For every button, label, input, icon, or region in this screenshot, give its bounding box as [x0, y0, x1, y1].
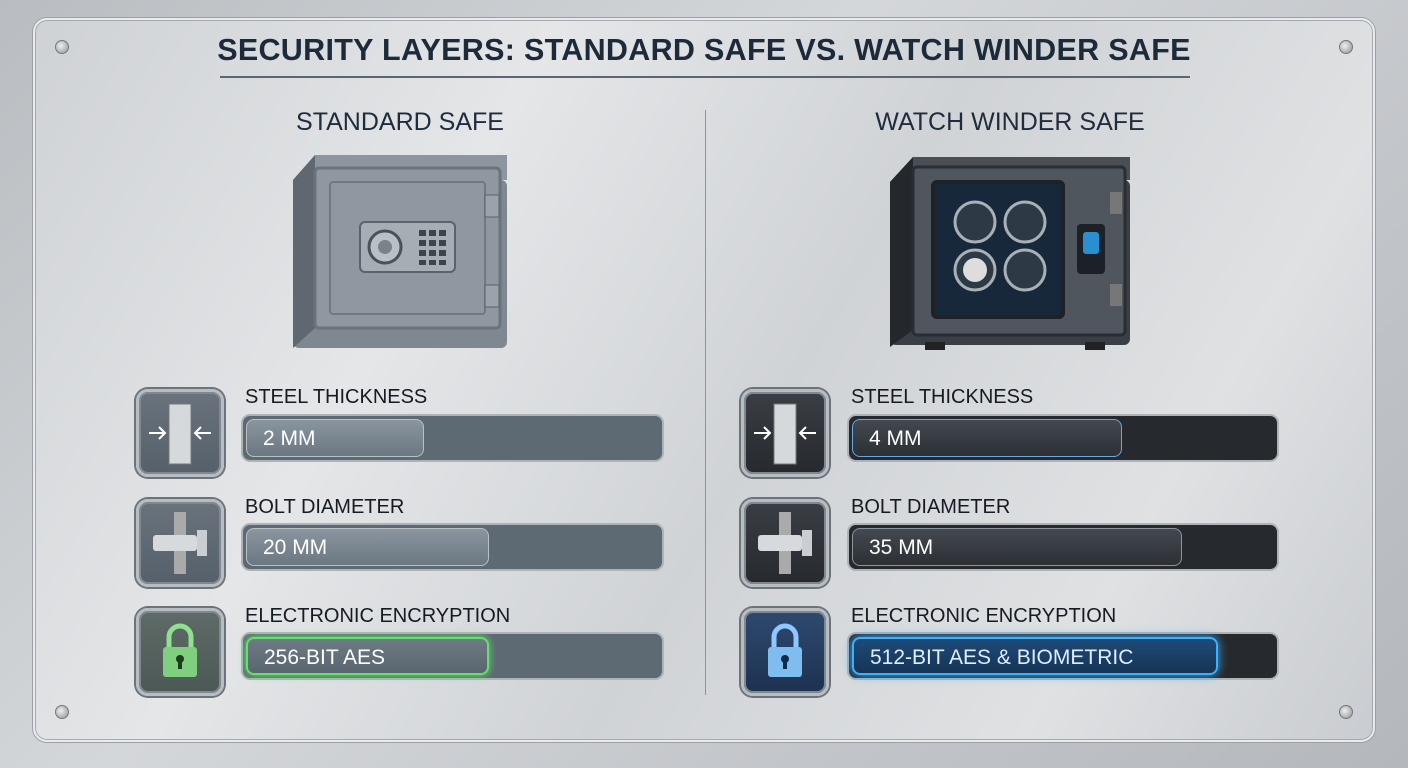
heading: watch winder safe: WATCH WINDER SAFE [875, 108, 1145, 136]
icon: green lock [136, 608, 224, 696]
row: standard bolt diameter [134, 496, 664, 589]
row: standard encryption [134, 605, 664, 698]
row: winder bolt diameter: BOLT DIAMETER [851, 496, 1010, 518]
bar: 20 mm [241, 523, 664, 571]
bar: 256-bit AES: 256-BIT AES [264, 646, 385, 669]
bar: 4 mm [847, 414, 1279, 462]
bar: 2 mm [241, 414, 664, 462]
bar: 20 mm: 20 MM [263, 536, 327, 559]
bar: 512-bit AES & biometric: 512-BIT AES & BIOMETRIC [870, 646, 1133, 669]
row: standard encryption: ELECTRONIC ENCRYPTION [245, 605, 510, 627]
heading: standard safe: STANDARD SAFE [296, 108, 504, 136]
icon: watch winder safe [890, 157, 1130, 350]
icon: standard safe [293, 155, 507, 348]
icon: bolt [136, 499, 224, 587]
bar: 4 mm: 4 MM [869, 427, 922, 450]
row: standard steel thickness: STEEL THICKNESS [245, 386, 427, 408]
row: standard steel thickness [134, 386, 664, 479]
icon: blue lock [741, 608, 829, 696]
row: winder bolt diameter [739, 496, 1279, 589]
row: winder steel thickness: STEEL THICKNESS [851, 386, 1033, 408]
title: SECURITY LAYERS: STANDARD SAFE VS. WATCH WINDER SAFE [217, 33, 1191, 67]
icon: steel thickness dark [741, 389, 829, 477]
bar: 35 mm [847, 523, 1279, 571]
row: standard bolt diameter: BOLT DIAMETER [245, 496, 404, 518]
icon: steel thickness [136, 389, 224, 477]
row: winder steel thickness [739, 386, 1279, 479]
bar: 2 mm: 2 MM [263, 427, 316, 450]
bar: 256-bit AES [241, 632, 664, 680]
icon: bolt dark [741, 499, 829, 587]
bar: 35 mm: 35 MM [869, 536, 933, 559]
row: winder encryption: ELECTRONIC ENCRYPTION [851, 605, 1116, 627]
bar: 512-bit AES & biometric [847, 632, 1279, 680]
row: winder encryption [739, 605, 1279, 698]
